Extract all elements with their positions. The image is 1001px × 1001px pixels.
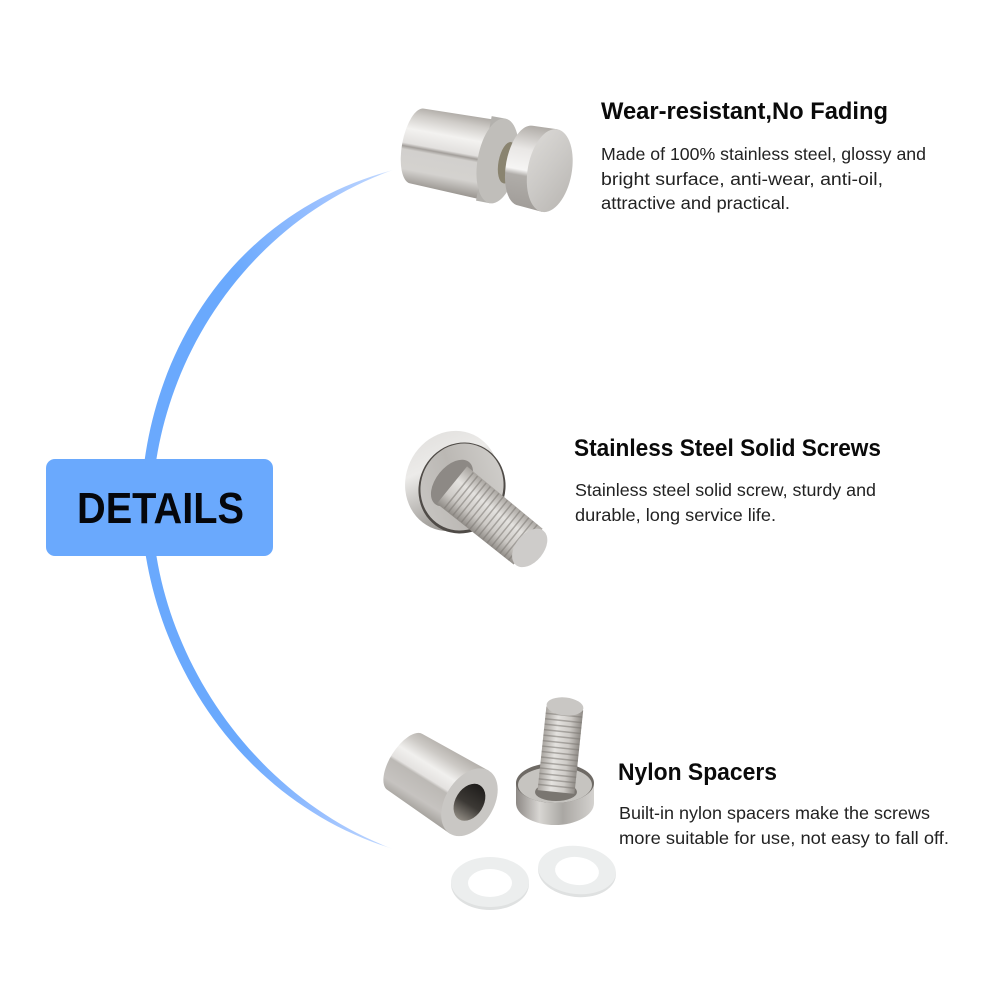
text block: wear-resistant — [601, 98, 926, 213]
product: nylon washers — [451, 842, 618, 910]
text block: solid screws — [574, 435, 881, 525]
curved arc: lower — [141, 508, 393, 849]
text block: nylon spacers: Nylon Spacers — [618, 759, 777, 786]
curved arc: upper — [141, 170, 393, 508]
product: assembled standoff — [394, 101, 579, 217]
product: screw with washer — [389, 415, 556, 575]
text block: wear-resistant: attractive and practical. — [601, 193, 790, 213]
text block: wear-resistant: Wear-resistant,No Fading — [601, 98, 888, 125]
text block: wear-resistant: bright surface, anti-wear, anti-oil, — [601, 169, 883, 189]
text block: solid screws: durable, long service life. — [575, 505, 776, 525]
text block: wear-resistant: Made of 100% stainless steel, glossy and — [601, 144, 926, 164]
product: disassembled screw — [516, 696, 594, 825]
product: threaded sleeve — [373, 723, 509, 846]
text block: solid screws: Stainless steel solid screw, sturdy and — [575, 480, 876, 500]
text block: solid screws: Stainless Steel Solid Screws — [574, 435, 881, 462]
text block: nylon spacers: Built-in nylon spacers make the screws — [619, 803, 930, 823]
text block: nylon spacers: more suitable for use, not easy to fall off. — [619, 828, 949, 848]
badge: details: DETAILS — [77, 484, 244, 533]
badge: details — [46, 459, 273, 556]
text block: nylon spacers — [618, 759, 949, 848]
